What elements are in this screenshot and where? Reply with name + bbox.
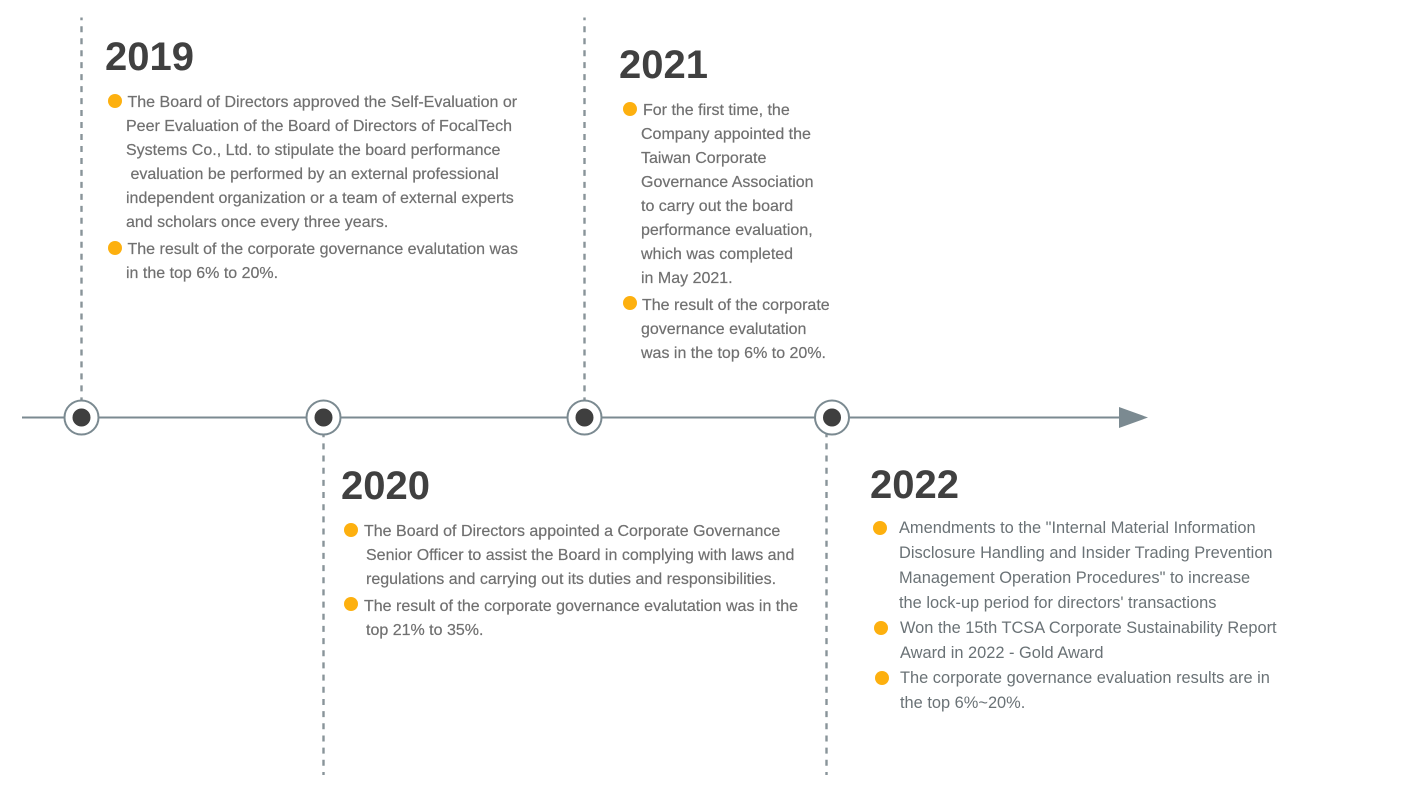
bullet [623,296,637,310]
bullet [344,523,358,537]
text block: 2019 board evaluation: The Board of Directors approved the Self-Evaluation or Peer Evaluation of the Board of Directors of FocalTech Systems Co., Ltd. to stipulate the board performance evaluation be performed by an external professional independent organization or a team of external experts and scholars once every three years. [126,94,517,231]
text block: 2019 result: The result of the corporate governance evalutation was in the top 6% to 20%. [126,241,518,282]
bullet [875,671,889,685]
bullet [108,94,122,108]
text block: 2021 board evaluation: For the first time, the Company appointed the Taiwan Corporate Governance Association to carry out the board performance evaluation, which was completed in May 2021. [641,102,814,287]
bullet [873,521,887,535]
bullet [623,102,637,116]
text block: 2022 result: The corporate governance evaluation results are in the top 6%~20%. [900,669,1270,712]
panel: 2021 [619,43,830,362]
bullet [874,621,888,635]
heading: 2021: 2021 [619,43,708,87]
text block: 2020 governance officer: The Board of Directors appointed a Corporate Governance Senior Officer to assist the Board in complying with laws and regulations and carrying out its duties and responsibilities. [364,523,794,588]
panel: 2020 [341,464,798,639]
text block: 2020 result: The result of the corporate governance evalutation was in the top 21% to 35%. [364,598,798,639]
heading: 2019: 2019 [105,35,194,79]
text block: 2022 amendments: Amendments to the "Internal Material Information Disclosure Handling and Insider Trading Prevention Management Operation Procedures" to increase the lock-up period for directors' transactions [899,519,1273,612]
heading: 2020: 2020 [341,464,430,508]
bullet [108,241,122,255]
bullet [344,597,358,611]
panel: 2019 [105,35,518,282]
text block: 2021 result: The result of the corporate governance evalutation was in the top 6% to 20%. [641,297,830,362]
panel: 2022 [870,463,1277,712]
heading: 2022: 2022 [870,463,959,507]
text block: 2022 award: Won the 15th TCSA Corporate Sustainability Report Award in 2022 - Gold Award [900,619,1277,662]
